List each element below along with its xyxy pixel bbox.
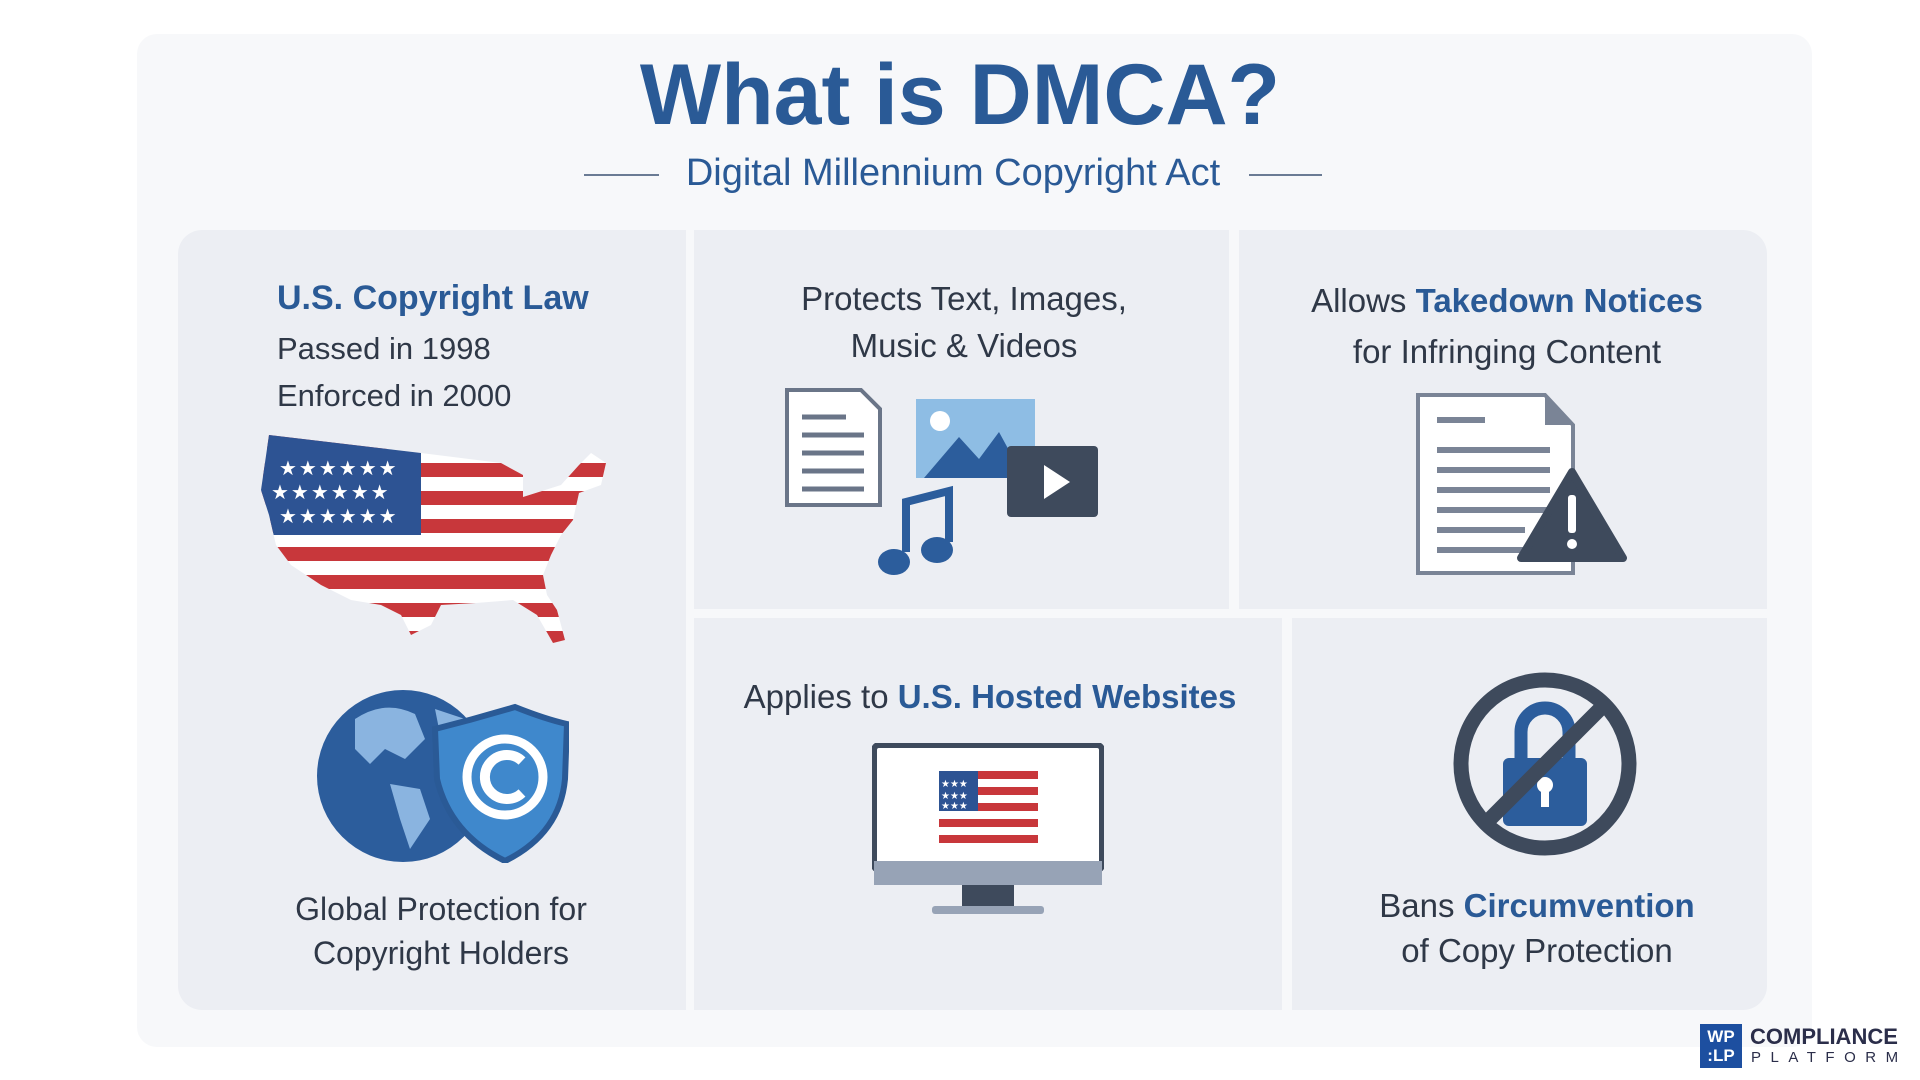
icon: US flag map: ★★★★★★ xyxy=(271,482,391,504)
text: protects xyxy=(801,280,1127,364)
panel: takedown notices xyxy=(1239,230,1767,609)
panel: protects content xyxy=(694,230,1229,609)
text: protects: Protects Text, Images, xyxy=(801,280,1127,317)
icon: US flag map: ★★★★★★ xyxy=(279,506,399,528)
logo: WP LP Compliance Platform xyxy=(1700,1024,1908,1068)
title: What is DMCA? xyxy=(640,47,1280,143)
icon: monitor with flag: ★★★ xyxy=(941,801,968,812)
text: global protection xyxy=(295,891,587,971)
icon: monitor with flag: ★★★ xyxy=(941,779,968,790)
text: bans circumvention xyxy=(1379,887,1695,969)
text: global protection: Copyright Holders xyxy=(313,935,569,971)
text: takedown: for Infringing Content xyxy=(1353,333,1661,370)
text: takedown: Allows Takedown Notices xyxy=(1311,282,1703,319)
text: dates: Passed in 1998 xyxy=(277,331,491,366)
logo: WP LP Compliance Platform: COMPLIANCE xyxy=(1750,1024,1898,1049)
icon: document with warning xyxy=(1416,393,1627,575)
panel: US hosted websites xyxy=(694,618,1282,1010)
text: dates: Enforced in 2000 xyxy=(277,378,511,413)
heading: U.S. Copyright Law: U.S. Copyright Law xyxy=(277,279,589,317)
icon: US flag map xyxy=(261,435,606,643)
logo: WP LP Compliance Platform: PLATFORM xyxy=(1751,1049,1908,1066)
subtitle: Digital Millennium Copyright Act xyxy=(686,152,1220,194)
logo: WP LP Compliance Platform: WP xyxy=(1707,1027,1735,1046)
icon: monitor with flag xyxy=(872,743,1104,914)
text: bans circumvention: of Copy Protection xyxy=(1401,932,1673,969)
text: applies: Applies to U.S. Hosted Websites xyxy=(744,678,1236,715)
text: bans circumvention: Bans Circumvention xyxy=(1379,887,1695,924)
icon: no lock xyxy=(1454,672,1636,856)
icon: globe with copyright shield xyxy=(317,690,569,863)
text: global protection: Global Protection for xyxy=(295,891,587,927)
text: takedown xyxy=(1311,282,1703,370)
icon: media set xyxy=(785,388,1098,575)
icon: US flag map: ★★★★★★ xyxy=(279,458,399,480)
icon: monitor with flag: ★★★ xyxy=(941,791,968,802)
text: protects: Music & Videos xyxy=(851,327,1077,364)
logo: WP LP Compliance Platform: :LP xyxy=(1707,1046,1735,1065)
text: dates xyxy=(277,331,511,413)
panel: copyright law xyxy=(178,230,686,1010)
panel: circumvention xyxy=(1292,618,1767,1010)
